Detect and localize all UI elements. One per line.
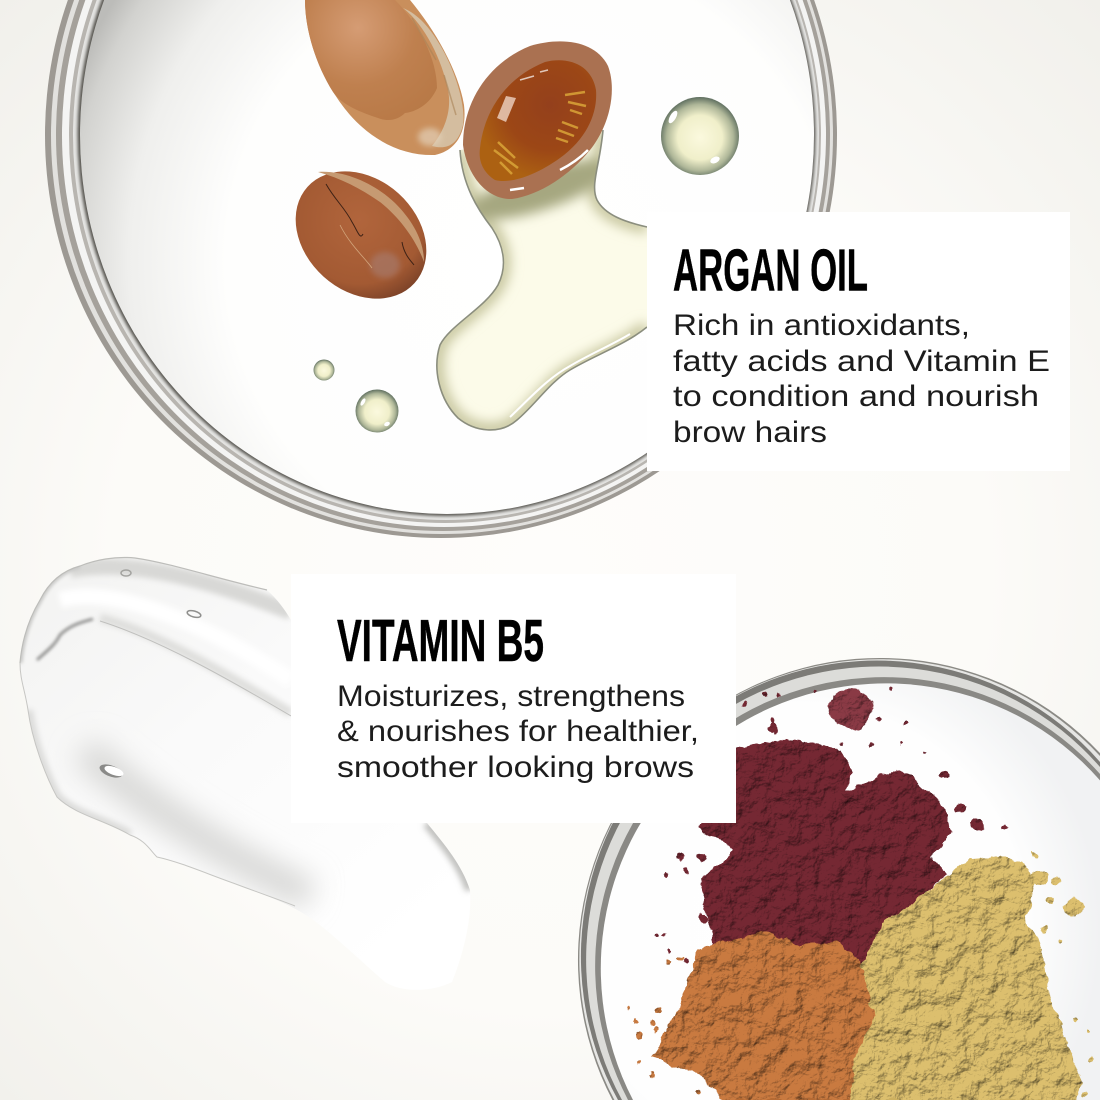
- glass dish: argan oil: [45, 0, 837, 538]
- body text: argan oil: [673, 309, 1050, 449]
- body text: argan oil: brow hairs: [673, 416, 827, 449]
- small droplet: [314, 360, 334, 380]
- body text: vitamin b5: [337, 680, 699, 784]
- argan nut: whole kernel: [270, 145, 452, 325]
- body text: vitamin b5: & nourishes for healthier,: [337, 715, 699, 748]
- text panel: vitamin b5: [291, 574, 736, 823]
- text panel: argan oil: [647, 212, 1070, 471]
- oil droplets: [314, 97, 739, 432]
- pigment: orange powder: [626, 930, 885, 1100]
- argan nut: whole shell top: [305, 0, 465, 155]
- medium droplet: [356, 390, 398, 432]
- body text: argan oil: fatty acids and Vitamin E: [673, 345, 1050, 378]
- body text: argan oil: to condition and nourish: [673, 380, 1039, 413]
- body text: argan oil: Rich in antioxidants,: [673, 309, 970, 342]
- oil puddle: [437, 130, 647, 430]
- glass dish: powders: [578, 658, 1100, 1100]
- large droplet: [661, 97, 739, 175]
- cream swatch: [19, 556, 470, 910]
- pigment: burgundy powder: [656, 688, 1008, 985]
- heading: vitamin b5: VITAMIN B5: [337, 608, 544, 674]
- pigment: yellow powder: [850, 852, 1093, 1100]
- body text: vitamin b5: smoother looking brows: [337, 751, 694, 784]
- body text: vitamin b5: Moisturizes, strengthens: [337, 680, 685, 713]
- heading: argan oil: ARGAN OIL: [673, 238, 868, 304]
- argan nut: cracked shell with oil: [463, 41, 612, 199]
